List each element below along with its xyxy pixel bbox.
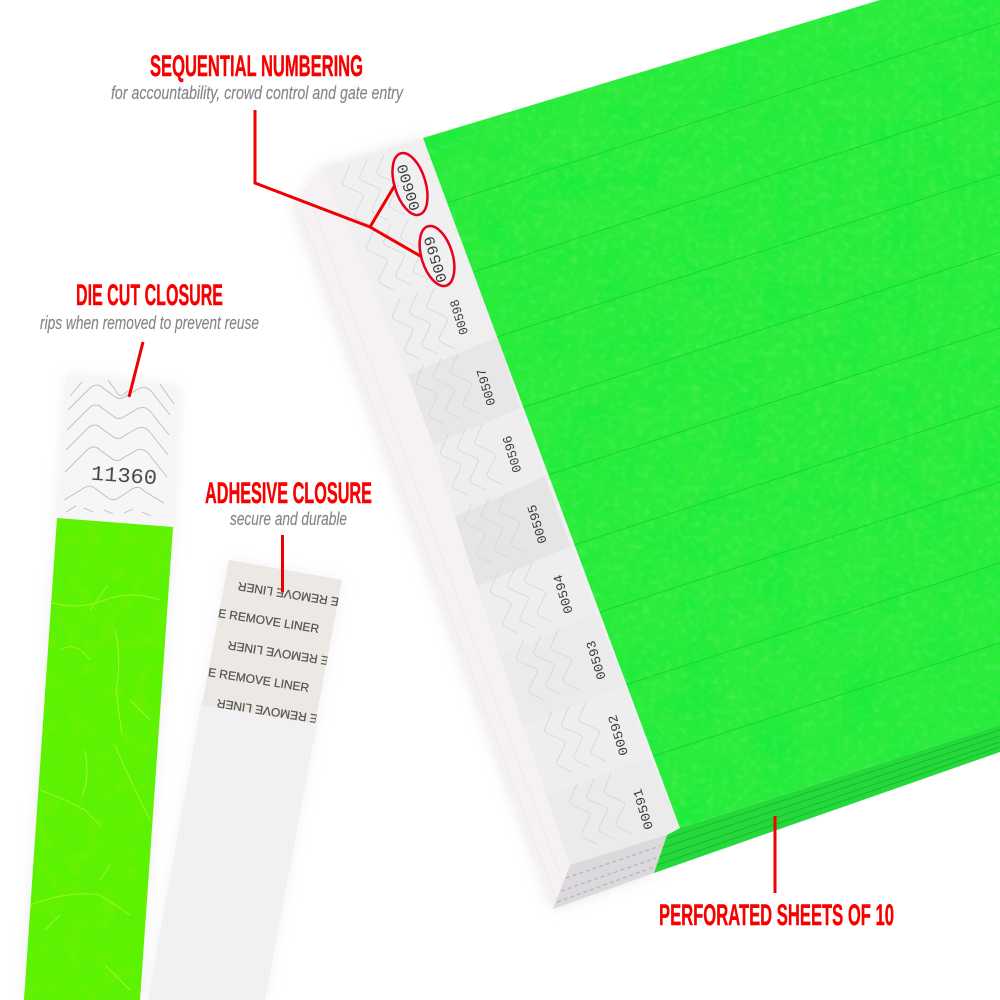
subtext: die cut closure: rips when removed to prevent reuse — [40, 313, 259, 333]
serial numbers — [395, 162, 657, 831]
die cut closure tab — [57, 375, 179, 527]
wave pattern on bands — [337, 154, 635, 848]
heading: adhesive closure: ADHESIVE CLOSURE — [205, 477, 372, 510]
bevelled end of stack — [553, 835, 667, 909]
lime band — [24, 518, 173, 1000]
leader line — [281, 535, 284, 592]
heading: sequential numbering: SEQUENTIAL NUMBERING — [150, 50, 363, 83]
wristband sheet stack — [293, 0, 1000, 909]
subtext: adhesive closure: secure and durable — [230, 509, 347, 529]
liner text: E REMOVE LINER — [237, 579, 340, 609]
adhesive wristband strip — [148, 560, 342, 1000]
green sheet face — [400, 0, 1000, 840]
serial numbers: 00593 — [584, 639, 610, 681]
serial numbers: 00592 — [605, 713, 632, 757]
leader line — [129, 342, 143, 397]
serial number 11360: 11360 — [90, 464, 158, 491]
callout: sequential numbering — [111, 50, 461, 290]
subtext: sequential numbering: for accountability, crowd control and gate entry — [111, 83, 404, 103]
highlight ellipses — [386, 149, 461, 290]
white band — [148, 700, 318, 1000]
white side edge — [293, 168, 570, 909]
heading: die cut closure: DIE CUT CLOSURE — [76, 279, 223, 312]
liner text: E REMOVE LINER — [217, 606, 320, 636]
serial numbers: 00597 — [474, 367, 499, 407]
leader line — [774, 816, 776, 893]
serial numbers: 00595 — [525, 503, 551, 545]
die cut wristband strip — [20, 375, 180, 1000]
liner text: E REMOVE LINER — [207, 665, 310, 695]
liner text — [207, 579, 340, 726]
serial numbers: 00594 — [551, 573, 577, 615]
serial numbers: 00600 — [395, 162, 425, 212]
serial numbers: 00596 — [500, 434, 525, 474]
serial numbers: 00591 — [630, 787, 657, 831]
callout: die cut closure — [40, 279, 259, 397]
green stack edge — [652, 725, 1000, 873]
adhesive liner — [202, 560, 342, 724]
callout: adhesive closure — [205, 477, 372, 592]
white band faces — [322, 138, 680, 865]
serial numbers: 00598 — [447, 298, 472, 336]
liner text: E REMOVE LINER — [227, 638, 330, 668]
liner text: E REMOVE LINER — [216, 696, 319, 726]
leader lines to serial numbers — [255, 110, 422, 257]
serial numbers: 00599 — [422, 234, 452, 284]
